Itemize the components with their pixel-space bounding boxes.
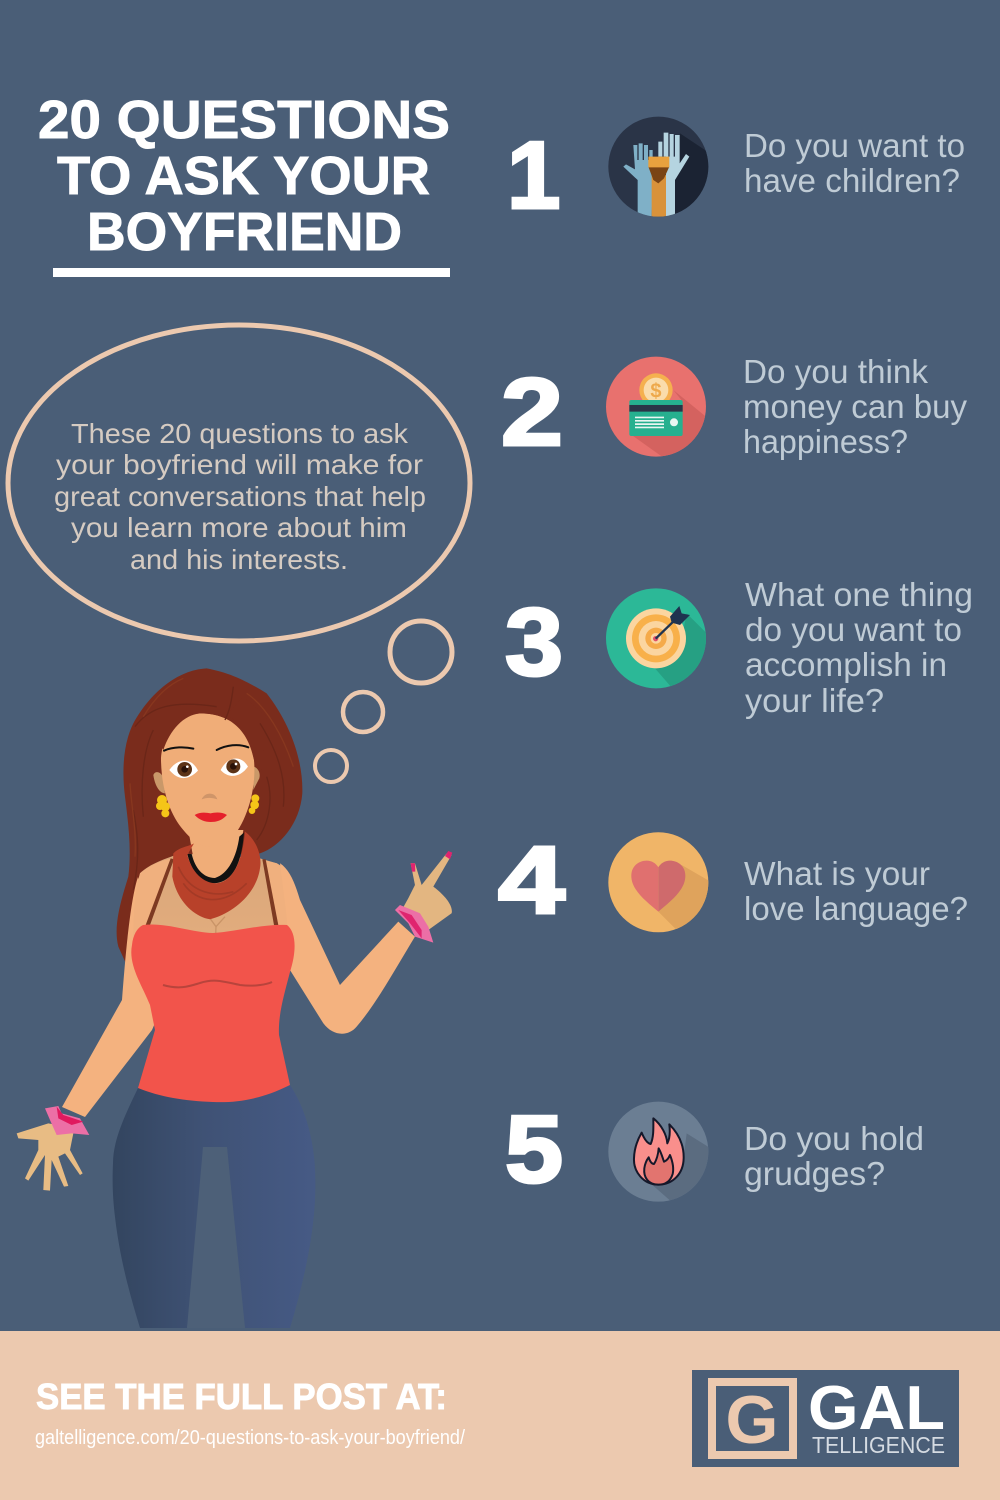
question text 4: What is your: [744, 855, 930, 892]
title: [38, 90, 450, 277]
question text 3: your life?: [745, 682, 884, 719]
icon: flame: [608, 1102, 713, 1203]
thought bubble with intro text: These 20 questions to ask: [71, 418, 409, 449]
question text 2: [743, 353, 967, 460]
title: 20 QUESTIONS: [38, 90, 450, 150]
question 1: [512, 116, 964, 217]
question text 3: accomplish in: [745, 646, 947, 683]
icon: coin and credit card: [606, 357, 710, 460]
thought bubble with intro text: your boyfriend will make for: [56, 449, 423, 480]
question 2: [501, 353, 967, 466]
question 2: 2: [501, 359, 563, 466]
question 3: [505, 576, 973, 719]
question text 2: money can buy: [743, 388, 967, 425]
question text 5: Do you hold: [744, 1120, 924, 1157]
question 4: [498, 827, 968, 937]
question text 1: have children?: [744, 162, 960, 199]
icon: dart target: [606, 588, 710, 693]
thought bubble with intro text: [8, 325, 470, 782]
thought bubble with intro text: great conversations that help: [54, 481, 426, 512]
question text 1: [744, 127, 965, 199]
footer band: [0, 1331, 1000, 1500]
icon: raised hands: [608, 117, 710, 218]
question text 3: do you want to: [745, 611, 962, 648]
icon: heart: [608, 832, 713, 937]
question text 4: [744, 855, 968, 927]
question 3: 3: [505, 589, 563, 696]
thought bubble with intro text: you learn more about him: [71, 512, 407, 543]
question 5: [505, 1096, 924, 1203]
question text 2: Do you think: [743, 353, 929, 390]
question text 5: [744, 1120, 924, 1192]
question 5: 5: [505, 1096, 563, 1203]
url: galtelligence.com/20-questions-to-ask-your-boyfriend/: [35, 1427, 465, 1449]
question 4: 4: [498, 827, 565, 934]
icon: coin and credit card: $: [650, 380, 662, 402]
question 1: 1: [507, 122, 560, 229]
logo: [692, 1370, 959, 1467]
question text 2: happiness?: [743, 423, 908, 460]
title: BOYFRIEND: [87, 202, 402, 262]
question text 3: What one thing: [745, 576, 973, 613]
illustration: woman: [17, 668, 452, 1328]
call to action: SEE THE FULL POST AT:: [36, 1376, 447, 1417]
logo: GAL: [808, 1374, 945, 1443]
title: TO ASK YOUR: [57, 146, 430, 206]
question text 3: [745, 576, 973, 719]
question text 5: grudges?: [744, 1155, 885, 1192]
logo: TELLIGENCE: [812, 1432, 945, 1458]
question text 4: love language?: [744, 890, 968, 927]
question text 1: Do you want to: [744, 127, 965, 164]
thought bubble with intro text: and his interests.: [130, 544, 348, 575]
logo: G: [726, 1382, 778, 1458]
